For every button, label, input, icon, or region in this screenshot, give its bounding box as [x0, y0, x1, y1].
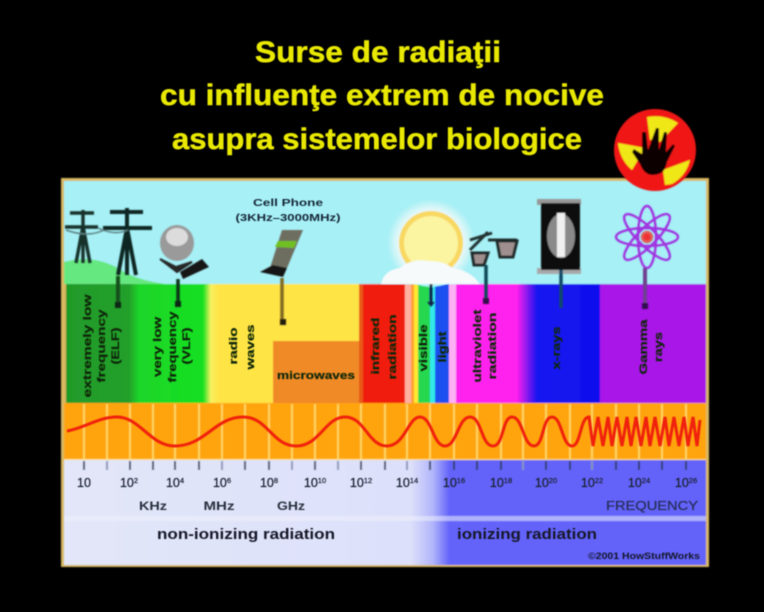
text: spectrum band labels: infrared — [370, 318, 382, 374]
text: frequency scale: 10 — [350, 476, 364, 490]
text: frequency scale: 10 — [120, 476, 134, 490]
text: frequency scale: 12 — [364, 476, 372, 485]
text: spectrum band labels: ultraviolet — [472, 309, 484, 382]
icon: x-ray film — [537, 199, 581, 308]
text: spectrum band labels: extremely low — [82, 294, 94, 398]
text: frequency scale: 10 — [166, 476, 180, 490]
text: frequency scale: 20 — [549, 476, 557, 485]
text: radiation type labels: ©2001 HowStuffWorks — [588, 551, 700, 561]
text: spectrum band labels: x-rays — [551, 326, 563, 370]
icon: sunglasses — [470, 232, 517, 304]
text: frequency scale: 4 — [180, 476, 184, 485]
text: frequency units: GHz — [277, 499, 305, 513]
text: frequency scale: 8 — [274, 476, 278, 485]
text: frequency scale: 18 — [504, 476, 512, 485]
text: frequency scale: 10 — [260, 476, 274, 490]
icon: computer — [160, 225, 209, 307]
title: cu influenţe extrem de nocive — [160, 79, 604, 112]
text: spectrum band labels: Gamma — [638, 318, 650, 374]
text: spectrum band labels: visible — [418, 325, 430, 371]
text: frequency scale: 24 — [642, 476, 650, 485]
text: frequency units — [139, 498, 698, 513]
text: spectrum band labels: microwaves — [277, 370, 355, 382]
text: frequency units: FREQUENCY — [606, 498, 698, 513]
icon: cell phone — [260, 230, 303, 325]
text: radiation type labels — [157, 526, 700, 561]
icon: atom — [616, 206, 678, 309]
text: spectrum band labels: frequency — [96, 308, 108, 382]
text: frequency scale: 10 — [490, 476, 504, 490]
text: spectrum band labels: very low — [152, 316, 164, 377]
text: frequency scale: 22 — [595, 476, 603, 485]
title: Surse de radiaţii — [255, 36, 501, 69]
text: frequency scale: 26 — [689, 476, 697, 485]
text: spectrum band labels: waves — [245, 324, 257, 371]
text: frequency scale: 10 — [675, 476, 689, 490]
text: frequency scale: 10 — [535, 476, 549, 490]
text: cell phone label: (3KHz–3000MHz) — [236, 213, 340, 224]
text: spectrum band labels: (ELF) — [110, 327, 122, 364]
text: spectrum band labels: light — [437, 331, 449, 362]
text: frequency scale: 10 — [628, 476, 642, 490]
text: frequency scale: 10 — [213, 476, 227, 490]
text: frequency scale: 10 — [443, 476, 457, 490]
text: spectrum band labels: (VLF) — [181, 327, 193, 364]
text: cell phone label: Cell Phone — [253, 197, 323, 209]
panel: electromagnetic spectrum chart — [61, 178, 709, 567]
icon: sun and cloud — [381, 199, 480, 307]
title — [160, 36, 604, 156]
text: frequency scale: 10 — [318, 476, 326, 485]
text: spectrum band labels: frequency — [167, 310, 179, 382]
text: frequency scale: 10 — [304, 476, 318, 490]
text: radiation type labels: non-ionizing radiation — [157, 526, 335, 543]
text: frequency scale: 10 — [396, 476, 410, 490]
text: frequency scale: 10 — [581, 476, 595, 490]
icon: power pylons — [65, 208, 152, 308]
text: spectrum band labels: rays — [653, 332, 665, 362]
text: spectrum band labels: radio — [228, 327, 240, 364]
text: frequency units: MHz — [204, 499, 234, 513]
chart: frequency wave — [67, 417, 700, 446]
text: radiation type labels: ionizing radiation — [457, 526, 597, 543]
text: spectrum band labels: radiation — [387, 314, 399, 380]
title: asupra sistemelor biologice — [172, 123, 582, 156]
text: cell phone label — [236, 197, 340, 224]
text: spectrum band labels: radiation — [487, 312, 499, 380]
text: spectrum band labels — [82, 294, 665, 398]
icon: radiation hazard hand badge — [614, 109, 696, 191]
text: frequency scale: 2 — [134, 476, 138, 485]
text: frequency scale: 6 — [227, 476, 231, 485]
text: frequency scale: 10 — [77, 476, 91, 490]
text: frequency scale — [77, 476, 697, 490]
text: frequency scale: 14 — [410, 476, 418, 485]
text: frequency scale: 16 — [457, 476, 465, 485]
text: frequency units: KHz — [139, 499, 167, 513]
